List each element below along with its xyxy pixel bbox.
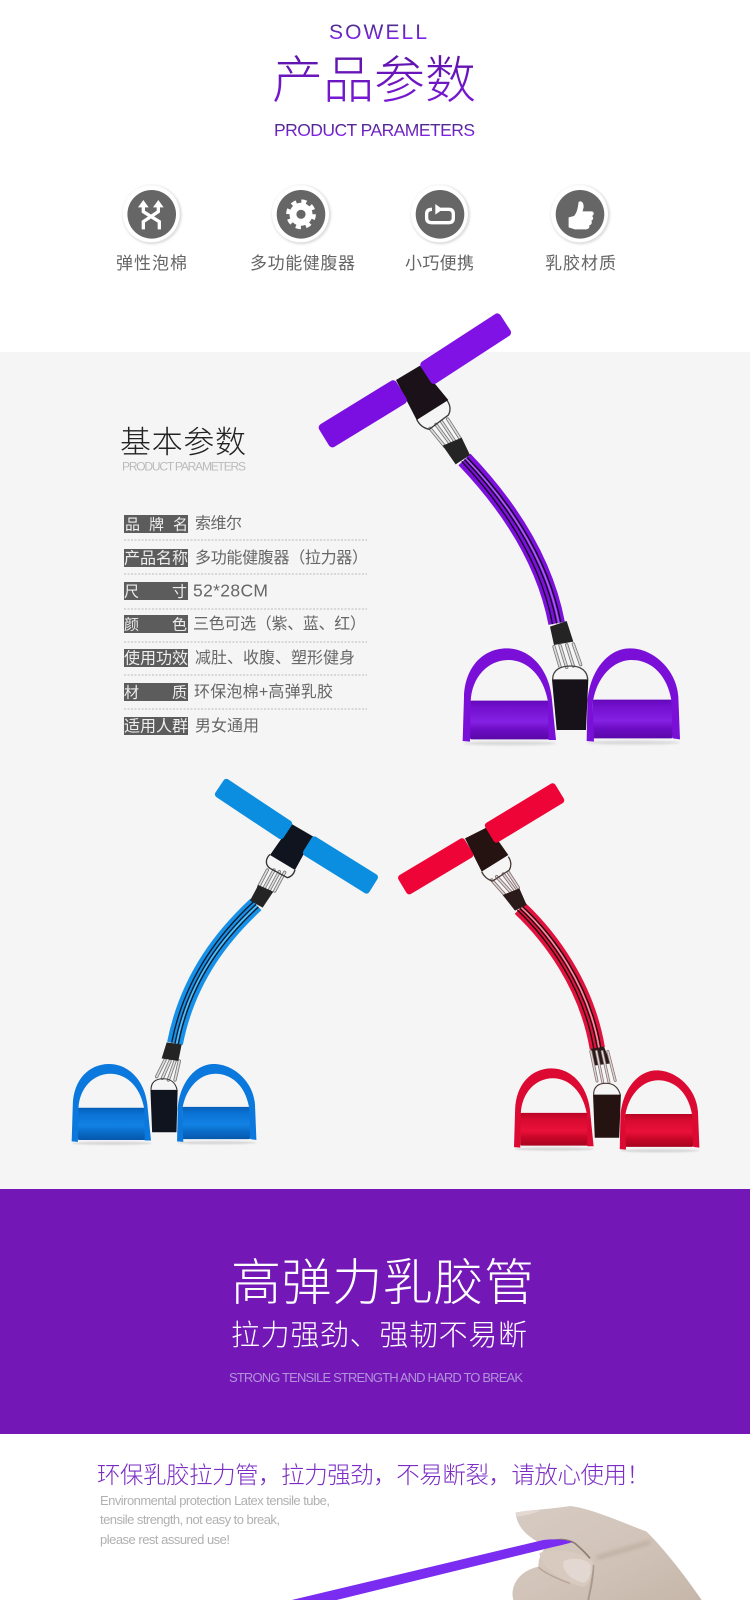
feature: multi-function — [250, 185, 355, 273]
latex tube — [292, 1539, 573, 1600]
product: red puller — [397, 782, 699, 1152]
english subtitle: PRODUCT PARAMETERS — [274, 120, 475, 140]
row: product name: 产品名称 — [124, 550, 188, 568]
gray parameters background — [0, 352, 750, 1189]
label: 弹性泡棉 — [116, 254, 187, 273]
description headline: 环保乳胶拉力管，拉力强劲，不易断裂，请放心使用！ — [97, 1462, 650, 1488]
row: product name — [124, 549, 368, 568]
row: effect: 使用功效 — [124, 650, 188, 668]
banner english: STRONG TENSILE STRENGTH AND HARD TO BREAK — [229, 1370, 523, 1385]
hand shading — [516, 1510, 650, 1600]
row: brand: 品牌名 — [125, 516, 188, 534]
label: 乳胶材质 — [545, 254, 616, 273]
row: audience: 适用人群 — [124, 718, 188, 736]
feature: latex — [545, 185, 616, 273]
row: size — [124, 580, 268, 600]
hand — [513, 1506, 702, 1600]
parameter table — [124, 514, 368, 736]
purple banner background — [0, 1189, 750, 1434]
icon: thumbs up — [551, 185, 610, 244]
feature: elastic foam — [116, 185, 187, 273]
description english — [100, 1493, 330, 1547]
row: material — [124, 683, 333, 702]
row: audience — [124, 716, 259, 736]
feature icons row — [116, 185, 616, 273]
banner subheadline: 拉力强劲、强韧不易断 — [231, 1319, 527, 1352]
product: purple puller — [317, 312, 680, 745]
row: audience: 男女通用 — [195, 716, 259, 735]
label: 多功能健腹器 — [250, 254, 355, 273]
row: colour: 颜色 — [124, 616, 187, 634]
purple upper body — [317, 312, 573, 645]
row: brand: 索维尔 — [195, 514, 242, 532]
row: material: 环保泡棉+高弹乳胶 — [194, 683, 333, 701]
row: effect — [124, 649, 355, 668]
description english: Environmental protection Latex tensile tube, — [100, 1493, 330, 1508]
row: size: 尺寸 — [124, 584, 187, 600]
icon: loop arrow — [411, 185, 470, 244]
feature: compact — [405, 185, 474, 273]
blue upper body — [157, 778, 379, 1080]
purple pedals — [463, 644, 680, 745]
banner headline: 高弹力乳胶管 — [231, 1255, 534, 1311]
row: product name: 多功能健腹器（拉力器） — [195, 549, 368, 567]
brand name: SOWELL — [329, 21, 427, 44]
icon: crossing arrows — [123, 185, 182, 244]
row: colour: 三色可选（紫、蓝、红） — [193, 615, 366, 633]
row: colour — [124, 615, 366, 634]
main title: 产品参数 — [272, 52, 476, 109]
row: brand — [124, 514, 242, 534]
product: blue puller — [72, 778, 379, 1145]
icon: gear — [272, 185, 331, 244]
heading: 基本参数 — [120, 425, 246, 460]
row: size: 52*28CM — [193, 580, 268, 600]
hand pulling tube — [292, 1506, 702, 1600]
header — [272, 21, 476, 140]
description english: tensile strength, not easy to break, — [100, 1512, 280, 1527]
row: effect: 减肚、收腹、塑形健身 — [195, 649, 355, 667]
purple banner text — [229, 1255, 534, 1385]
heading english: PRODUCT PARAMETERS — [122, 460, 246, 474]
basic parameters heading — [120, 425, 246, 474]
label: 小巧便携 — [405, 254, 474, 273]
blue pedals — [72, 1064, 256, 1145]
row: material: 材质 — [124, 684, 187, 702]
description english: please rest assured use! — [100, 1532, 230, 1547]
latex tube description — [97, 1462, 650, 1547]
red pedals — [514, 1051, 699, 1152]
red upper body — [397, 782, 611, 1066]
